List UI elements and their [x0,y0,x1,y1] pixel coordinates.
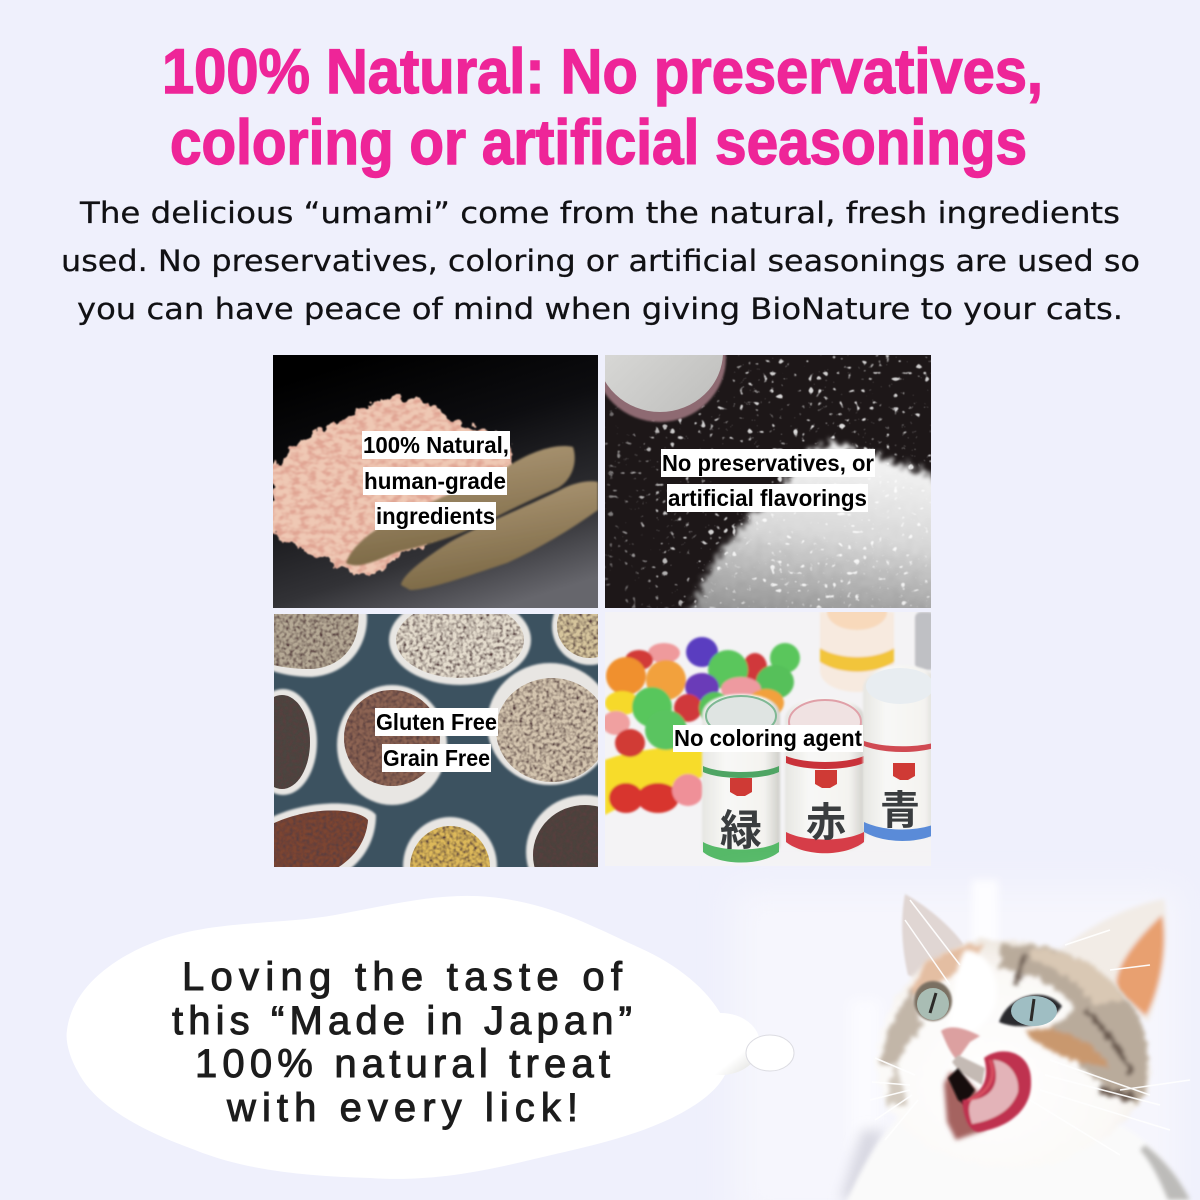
colorful candies [602,637,800,815]
label: gluten and grain free: Gluten Free [376,709,497,735]
panel: no preservatives photo [605,355,931,608]
red bottle: 赤 [806,790,846,848]
red bottle [785,698,865,855]
scattered crystals [605,355,931,608]
blue bottle: 青 [880,778,920,836]
speech bubble text: with every lick! [226,1086,578,1130]
title: 100% Natural: No preservatives, [162,37,1043,107]
label: natural ingredients: 100% Natural, [363,432,509,458]
panel: natural ingredients photo [270,355,598,608]
label: no preservatives [661,449,875,512]
cat photo [735,880,1192,1200]
large small bubble [682,1013,760,1075]
speech bubble text: this “Made in Japan” [172,999,632,1043]
green bottle: 緑 [720,797,762,858]
photo backdrop [735,880,1180,1200]
grey bottle [914,612,931,671]
grain fills [274,614,598,867]
right ear [1060,899,1166,1022]
white forehead blaze [945,950,997,1035]
spoon of salt [605,355,728,424]
orange bottle [818,612,896,692]
whiskers [870,900,1190,1155]
bowl rims [274,614,598,867]
intro text block: you can have peace of mind when giving BioNature to your cats. [77,292,1123,326]
muzzle [952,1055,985,1085]
dried bonito fillets [346,446,598,590]
thought bubble [67,896,794,1179]
mouth interior [948,1068,975,1105]
label: no preservatives: No preservatives, or [662,450,874,476]
blue bottle [863,665,940,842]
bubble body [67,896,731,1179]
bonito flakes [270,397,515,572]
intro text block [61,196,1140,326]
speech bubble text: 100% natural treat [195,1042,610,1086]
panel: grains photo [274,614,598,867]
label: no coloring agent: No coloring agent [674,725,862,751]
fur markings [880,944,1148,1105]
label: gluten and grain free: Grain Free [383,745,490,771]
right eye [999,995,1062,1026]
speech bubble text [172,955,632,1130]
label: no preservatives: artificial flavorings [668,485,867,511]
label: natural ingredients: human-grade [364,468,506,494]
speech bubble text: Loving the taste of [182,955,623,999]
panel: no coloring agent photo [605,612,931,862]
body [845,1110,1192,1200]
right shoulder marking [1140,1145,1190,1200]
green bottle [702,694,780,863]
intro text block: used. No preservatives, coloring or artificial seasonings are used so [61,244,1140,278]
title: coloring or artificial seasonings [170,108,1027,178]
head [877,940,1150,1169]
salt pile [690,445,950,625]
title [162,37,1043,178]
smallest bubble [746,1035,794,1071]
intro text block: The delicious “umami” come from the natural, fresh ingredients [79,196,1120,230]
open mouth [944,1072,985,1140]
label: natural ingredients [362,431,510,530]
nose [941,1027,980,1060]
left ear [902,894,964,985]
label: natural ingredients: ingredients [376,503,495,529]
label: gluten and grain free [375,708,498,772]
left eye [914,981,952,1021]
tongue [962,1051,1031,1132]
